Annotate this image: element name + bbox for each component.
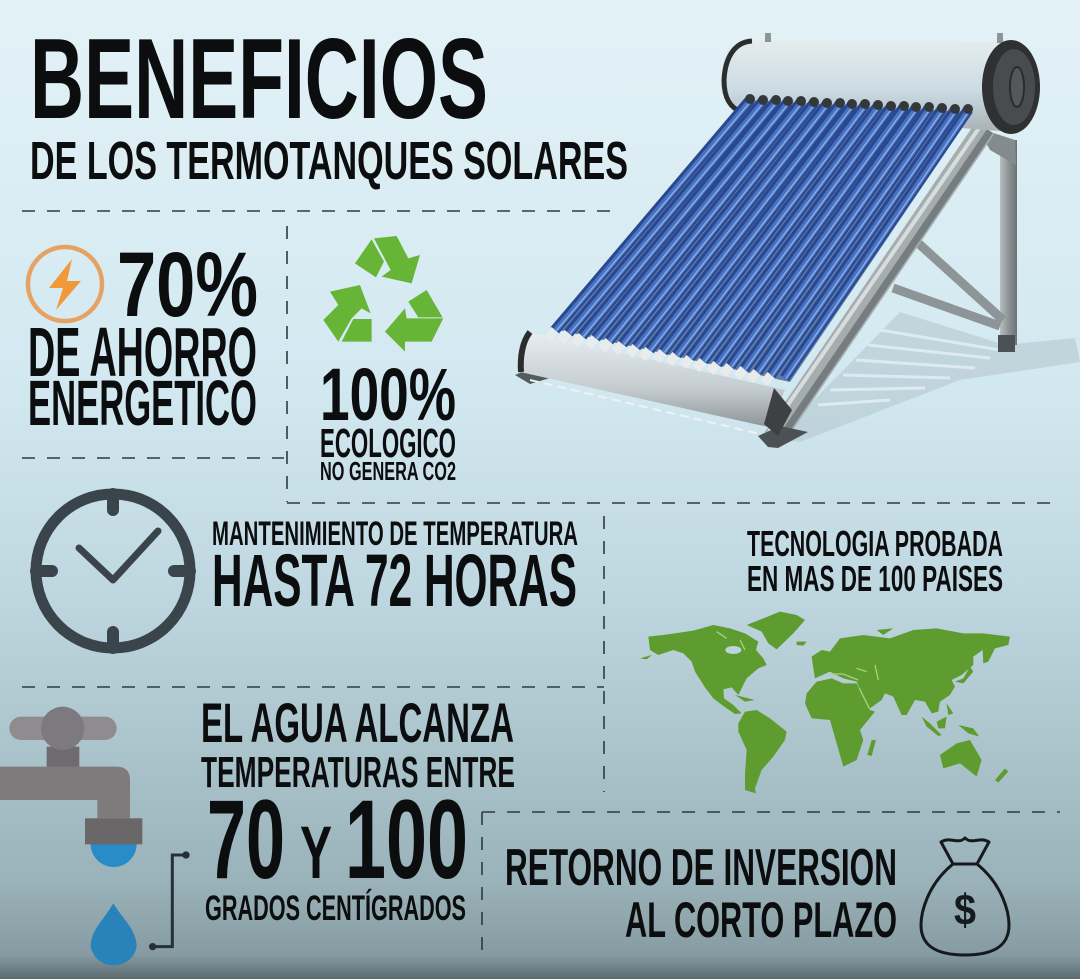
subheading: DE LOS TERMOTANQUES SOLARES [30, 131, 628, 191]
icon: lightning bolt [28, 247, 102, 321]
text: al corto plazo: AL CORTO PLAZO [625, 892, 897, 948]
icon: money bag [921, 838, 1009, 955]
text: el agua alcanza: EL AGUA ALCANZA [201, 691, 514, 754]
illustration: solar water heater [515, 33, 1080, 448]
label: no genera co2: NO GENERA CO2 [320, 456, 456, 486]
icon: faucet [0, 707, 190, 965]
braces [893, 243, 1003, 326]
stat: 100% ecological [320, 236, 456, 486]
icon: clock [36, 494, 190, 648]
title [30, 16, 628, 191]
icon: recycle [323, 236, 443, 352]
bottom header [520, 330, 792, 436]
heading: beneficios: BENEFICIOS [30, 16, 488, 143]
label: energetico: ENERGETICO [28, 367, 257, 439]
main rail [774, 128, 985, 438]
value 100%: 100% [320, 353, 456, 436]
text: grados centigrados: GRADOS CENTÍGRADOS [205, 888, 466, 928]
return on investment [505, 838, 1009, 955]
label: ecologico: ECOLOGICO [320, 420, 456, 466]
evacuated tubes [550, 94, 973, 382]
water temperature [0, 691, 515, 965]
world map [640, 612, 1010, 793]
text: hasta 72 horas: HASTA 72 HORAS [212, 539, 577, 622]
value: 70 y 100: 100 [345, 777, 468, 902]
proven technology [640, 523, 1010, 793]
text: temperaturas entre: TEMPERATURAS ENTRE [201, 748, 515, 797]
icon: money bag: $ [954, 886, 976, 935]
text: mantenimiento: MANTENIMIENTO DE TEMPERATURA [212, 515, 578, 553]
value: 70 y 100: Y [300, 811, 332, 894]
label: de ahorro: DE AHORRO [28, 313, 257, 391]
rear leg [1000, 140, 1017, 345]
stat: 70% energy saving [28, 234, 258, 439]
ground shadow [775, 312, 1080, 442]
tank [722, 33, 1040, 134]
value 70%: 70% [117, 234, 258, 336]
value: 70 y 100 [207, 777, 468, 902]
value: 70 y 100: 70 [207, 777, 285, 902]
temperature retention [36, 494, 578, 648]
